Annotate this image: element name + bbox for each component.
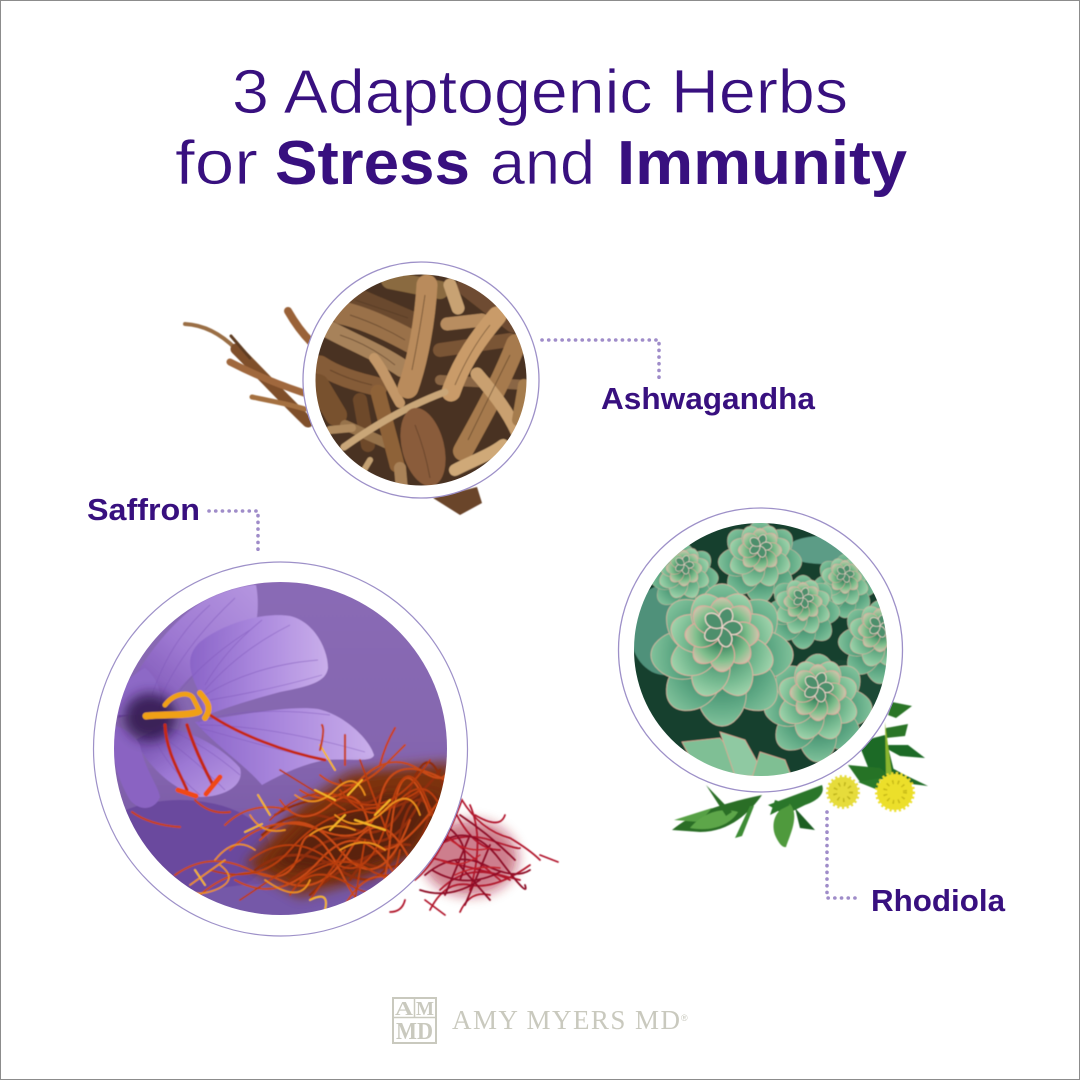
ashwagandha bottom root stub bbox=[433, 487, 482, 515]
rosette: top bbox=[718, 515, 802, 604]
title bbox=[175, 58, 908, 198]
rosette: middle right bbox=[766, 570, 840, 649]
title: Immunity bbox=[617, 129, 908, 198]
yellow anthers bbox=[146, 693, 209, 718]
rosette: upper right bbox=[813, 550, 877, 618]
connector: saffron bbox=[209, 511, 258, 553]
bottom leaves bbox=[682, 732, 792, 778]
rosette: lower right bbox=[764, 647, 872, 762]
title: and bbox=[490, 129, 595, 198]
rhodiola plant photo bbox=[634, 523, 887, 776]
rhodiola circle frame bbox=[618, 508, 902, 792]
rosette: far right bbox=[837, 600, 887, 685]
root streak texture bbox=[330, 295, 510, 478]
logo: Amy Myers MD bbox=[393, 998, 688, 1045]
label: rhodiola: Rhodiola bbox=[871, 883, 1006, 918]
ashwagandha root photo bbox=[316, 274, 526, 486]
saffron circle frame bbox=[94, 562, 468, 936]
saffron pile threads bbox=[132, 725, 448, 910]
label: ashwagandha: Ashwagandha bbox=[601, 381, 816, 416]
sprig: middle bbox=[768, 785, 823, 847]
logo mark: M bbox=[416, 998, 434, 1020]
herb: ashwagandha bbox=[185, 262, 539, 515]
saffron pile base bbox=[245, 762, 452, 897]
loose rhodiola sprigs bbox=[672, 702, 928, 847]
sprig: left leaves bbox=[672, 785, 762, 838]
registered mark: ® bbox=[681, 1013, 688, 1023]
flower: small yellow cluster bbox=[828, 777, 858, 807]
connector: ashwagandha bbox=[542, 340, 659, 380]
petal veins bbox=[152, 598, 365, 795]
loose ashwagandha roots bbox=[185, 311, 311, 422]
title: for bbox=[175, 129, 258, 198]
title: Stress bbox=[275, 129, 470, 198]
logo mark: MD bbox=[396, 1019, 433, 1045]
red styles and stigma bbox=[165, 715, 325, 796]
herb: rhodiola bbox=[618, 508, 928, 898]
herb: saffron bbox=[90, 562, 558, 936]
logo mark: A bbox=[395, 998, 414, 1020]
logo mark bbox=[393, 998, 436, 1045]
logo wordmark: AMY MYERS MD bbox=[452, 1005, 680, 1035]
rosette: back left bbox=[652, 544, 720, 606]
connector: rhodiola bbox=[827, 812, 861, 898]
label: saffron: Saffron bbox=[87, 492, 200, 527]
flower: large yellow cluster bbox=[877, 774, 913, 810]
flower petals bbox=[112, 585, 374, 808]
title: 3 Adaptogenic Herbs bbox=[232, 58, 848, 127]
rosette: main bbox=[651, 575, 793, 726]
loose saffron threads bbox=[390, 800, 558, 915]
flower dark centre bbox=[124, 693, 176, 741]
sprig: right stem bbox=[848, 702, 928, 790]
ashwagandha circle frame bbox=[303, 262, 539, 498]
saffron flower photo bbox=[114, 582, 447, 915]
